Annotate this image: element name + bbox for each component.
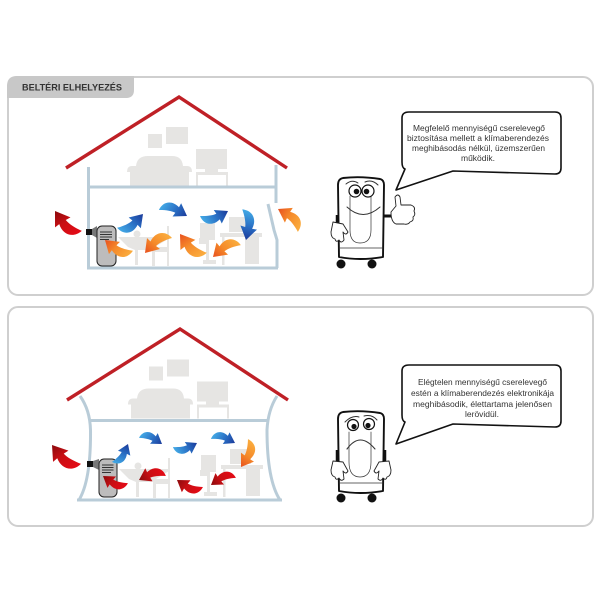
arrow: hot air second (139, 464, 167, 488)
speech bubble: insufficient air: estén a klímaberendezés elektronikája (411, 388, 554, 398)
arrow: warm air second (145, 233, 172, 253)
red roof (66, 97, 287, 168)
arrow: warm air fourth (213, 238, 241, 260)
arrow: hot exhaust leaving (50, 445, 82, 469)
arrow: hot exhaust leaving (52, 211, 84, 236)
arrow: cool air fourth (210, 428, 235, 450)
lower floor furniture (118, 217, 262, 266)
speech bubble: insufficient air (396, 365, 561, 444)
panel: adequate ventilation (7, 76, 593, 295)
arrow: cool air falling (230, 206, 262, 240)
sad character (331, 411, 391, 502)
arrow: hot air fourth (211, 469, 237, 490)
arrow: hot air third (177, 474, 204, 497)
panel: insufficient ventilation (8, 307, 593, 526)
speech bubble: adequate air: biztosítása mellett a klímaberendezés (407, 133, 549, 143)
portable air conditioner (86, 226, 116, 266)
heading tab (7, 76, 134, 98)
speech bubble: insufficient air: Elégtelen mennyiségű cserelevegő (418, 377, 547, 387)
arrow: fresh air through window (278, 205, 303, 235)
happy character (331, 177, 415, 268)
arrow: warm air third (178, 234, 208, 258)
speech bubble: insufficient air: lerövidül. (465, 409, 499, 419)
bulging house walls (77, 396, 282, 500)
arrow: cool air third (172, 436, 197, 458)
arrow: cool air top (158, 198, 187, 223)
arrow: cool air middle (199, 203, 228, 228)
arrow: warm air into unit (105, 236, 134, 259)
arrow: hot air into unit (103, 471, 129, 492)
arrow: cool air second (138, 429, 162, 449)
speech bubble: adequate air (396, 112, 561, 190)
speech bubble: insufficient air: meghibásodik, élettartama jelenősen (413, 399, 552, 409)
speech bubble: adequate air: működik. (461, 153, 495, 163)
house walls (87, 165, 278, 268)
arrow: warming air falling (235, 438, 259, 467)
speech bubble: adequate air: Megfelelő mennyiségű cserelevegő (413, 123, 545, 133)
speech bubble: adequate air: meghibásodás nélkül, üzemszerűen (412, 143, 545, 153)
upper floor furniture (128, 360, 229, 418)
lower floor furniture (119, 449, 263, 498)
upper floor furniture (127, 127, 228, 186)
arrow: cool air from unit (108, 444, 133, 466)
red roof (67, 329, 288, 400)
arrow: cool air from unit (117, 214, 143, 233)
heading tab: BELTÉRI ELHELYEZÉS (22, 82, 122, 94)
portable air conditioner (87, 459, 117, 497)
